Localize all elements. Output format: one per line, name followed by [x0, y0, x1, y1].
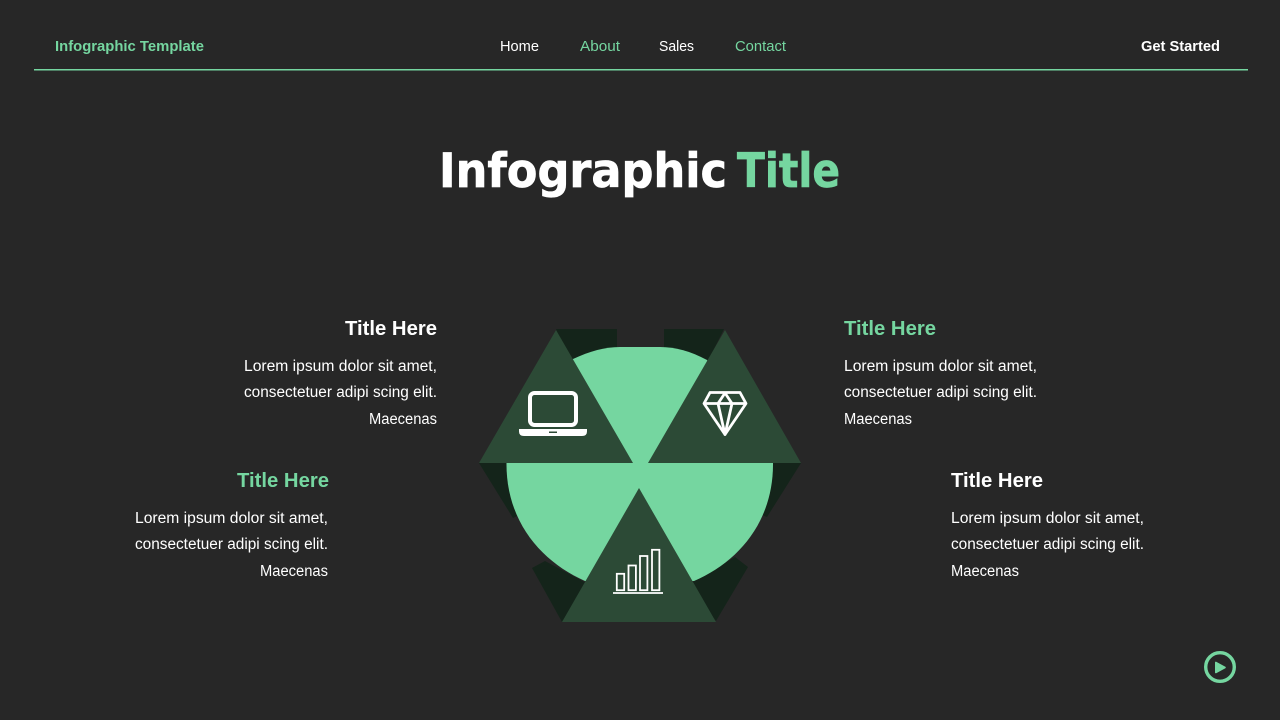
central hexagon diagram: [479, 329, 801, 622]
text block: top right: Maecenas: [844, 411, 912, 428]
text block: top left: [244, 318, 437, 428]
text block: bottom right: Title Here: [951, 470, 1043, 492]
text block: top left: Maecenas: [369, 411, 437, 428]
title: Title: [737, 144, 840, 199]
text block: top right: Lorem ipsum dolor sit amet,: [844, 358, 1037, 375]
text block: top left: Title Here: [345, 318, 437, 340]
text block: bottom left: consectetuer adipi scing elit.: [135, 536, 328, 553]
green circle: [506, 347, 773, 581]
nav: about: About: [580, 39, 620, 55]
text block: bottom right: Maecenas: [951, 563, 1019, 580]
icon: diamond: [704, 392, 746, 434]
text block: bottom right: [951, 470, 1144, 580]
text block: top right: Title Here: [844, 318, 936, 340]
text block: top left: Lorem ipsum dolor sit amet,: [244, 358, 437, 375]
nav: sales: Sales: [659, 39, 694, 55]
text block: top right: consectetuer adipi scing elit.: [844, 384, 1037, 401]
text block: bottom right: Lorem ipsum dolor sit amet,: [951, 510, 1144, 527]
title: Infographic: [439, 144, 727, 199]
get started link: Get Started: [1141, 39, 1220, 55]
text block: bottom left: Lorem ipsum dolor sit amet,: [135, 510, 328, 527]
icon: laptop: [519, 393, 587, 436]
dark shadow shapes: [479, 329, 801, 622]
play button: [1206, 653, 1234, 681]
text block: bottom left: Title Here: [237, 470, 329, 492]
text block: bottom right: consectetuer adipi scing elit.: [951, 536, 1144, 553]
text block: top right: [844, 318, 1037, 428]
triangle: top left: [479, 330, 633, 463]
nav: contact: Contact: [735, 39, 786, 55]
header bar: [34, 39, 1248, 70]
nav: home: Home: [500, 39, 539, 55]
triangle: bottom: [562, 488, 716, 622]
text block: top left: consectetuer adipi scing elit.: [244, 384, 437, 401]
triangle: top right: [648, 330, 801, 463]
brand label: Infographic Template: [55, 39, 204, 55]
icon: bar chart: [613, 550, 663, 593]
text block: bottom left: Maecenas: [260, 563, 328, 580]
text block: bottom left: [135, 470, 329, 580]
